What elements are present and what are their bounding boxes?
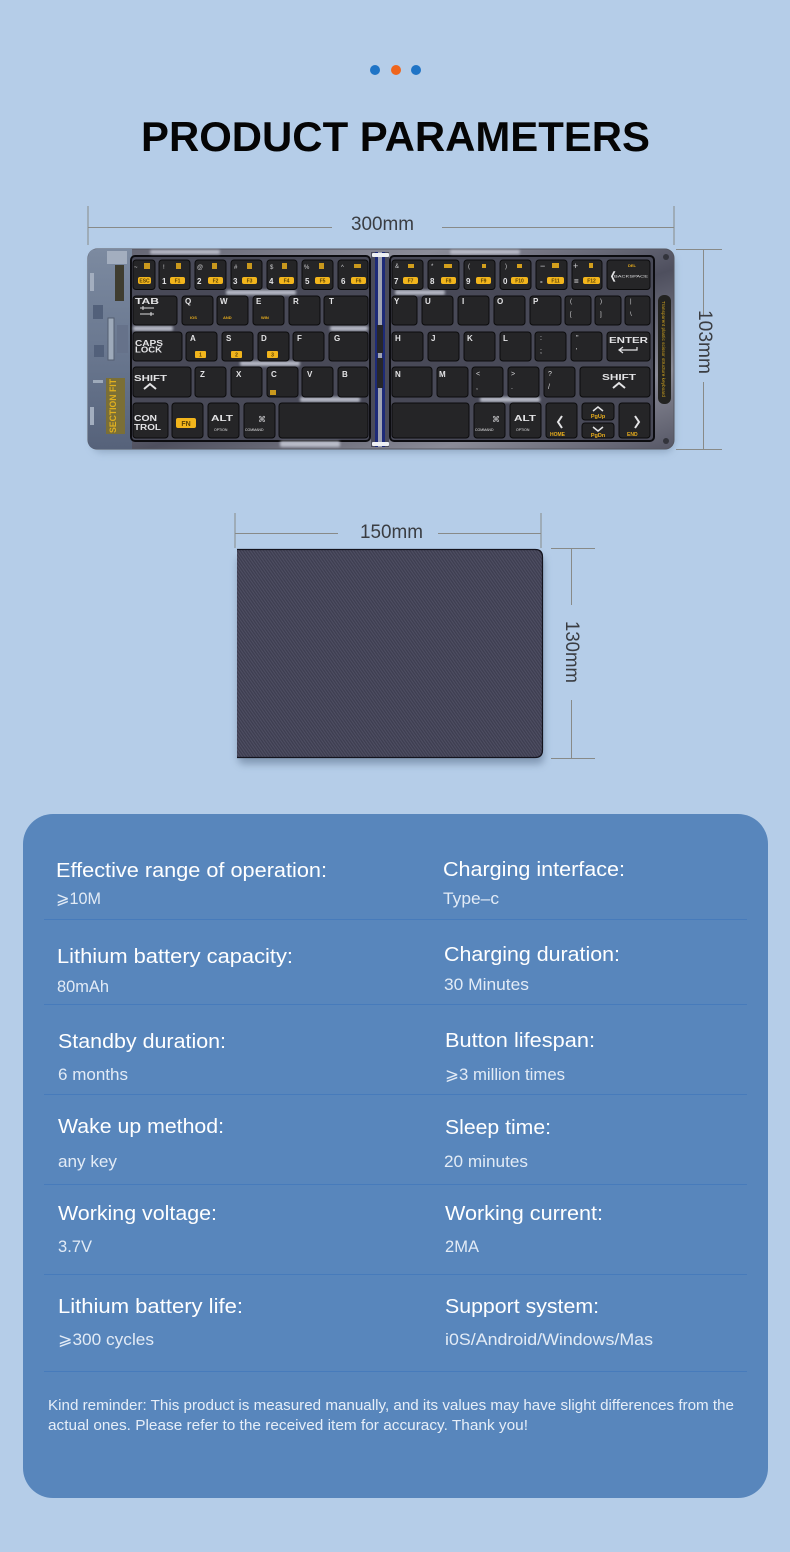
cover edge [237, 550, 542, 758]
left keys row 1: # [234, 265, 238, 271]
right keys row 1: * [431, 264, 434, 270]
right keys row 3: ; [540, 348, 542, 355]
row dividers [44, 920, 747, 1372]
right side strip [658, 254, 671, 444]
spec: charging duration [444, 943, 620, 994]
left keys row 3: 3 [271, 352, 274, 358]
right keys row 1: F10 [515, 278, 524, 284]
left keys row 1: F4 [284, 278, 290, 284]
left keys row 2: TAB [135, 297, 159, 306]
spec: effective range [56, 859, 327, 908]
dimension: 130mm height: 130mm [561, 621, 582, 683]
right keys row 1: 9 [466, 277, 471, 286]
right keys row 3: K [467, 334, 473, 343]
spec: working current [445, 1202, 603, 1256]
left keys row 1: F1 [175, 278, 181, 284]
left keys row 1: 3 [233, 277, 238, 286]
left keys row 1: F3 [247, 278, 253, 284]
right keys row 2: P [533, 297, 539, 306]
left keys row 2: AND [223, 315, 232, 320]
left keys row 1: F5 [320, 278, 326, 284]
right keys row 4: M [439, 370, 446, 379]
parameters panel [23, 814, 768, 1498]
spec: battery capacity: 80mAh [57, 977, 109, 996]
spec: charging interface: Charging interface: [443, 858, 625, 881]
keyboard shadow [92, 254, 674, 452]
spec: button lifespan: ⩾3 million times [445, 1065, 565, 1084]
left keys row 1: 6 [341, 277, 346, 286]
left keys row 4: C [271, 370, 277, 379]
left keys row 3: 1 [199, 352, 202, 358]
left keys row 3: D [261, 334, 267, 343]
spec: battery life: Lithium battery life: [58, 1295, 243, 1318]
left keys row 3: LOCK [135, 346, 162, 354]
left keys row 5: TROL [134, 423, 161, 432]
transparent circuit section [88, 249, 132, 449]
left keys row 4 [133, 367, 368, 397]
left keys row 3: S [226, 334, 232, 343]
fabric cover [237, 549, 543, 758]
right keys row 5: PgDn [591, 433, 606, 439]
left keys row 4: SHIFT [134, 374, 167, 383]
right keys row 4: , [476, 384, 478, 391]
right keys row 1: = [574, 277, 579, 286]
spec: support system: Support system: [445, 1295, 599, 1318]
right keys row 1: ( [468, 264, 470, 270]
spec: sleep time: 20 minutes [444, 1152, 528, 1171]
kind reminder note: actual ones. Please refer to the received item for accuracy. Thank you! [48, 1417, 528, 1434]
spec: button lifespan: Button lifespan: [445, 1029, 595, 1052]
left keys row 2: Q [185, 297, 191, 306]
right keys row 2: \ [630, 312, 632, 318]
left keys row 3: 2 [235, 352, 238, 358]
right keys row 3: L [503, 334, 508, 343]
panel background [23, 814, 768, 1498]
left keys row 1: 5 [305, 277, 310, 286]
transparent circuit section: SECTION FIT [108, 379, 118, 433]
right keys row 3: ENTER [609, 336, 648, 345]
right keys row 4 [392, 367, 650, 397]
spec: charging interface: Type–c [443, 889, 500, 908]
left keys row 1: ESC [139, 278, 150, 284]
right keys row 2: ) [600, 299, 602, 305]
left keys row 5: ALT [211, 414, 233, 423]
spec: charging interface [443, 858, 625, 908]
right keys row 1: F9 [481, 278, 487, 284]
left keys row 3: A [190, 334, 196, 343]
left keys row 5: CON [134, 414, 157, 423]
spec: effective range: ⩾10M [56, 889, 101, 908]
left keys row 5: OPTION [214, 428, 228, 432]
title: PRODUCT PARAMETERS [141, 113, 650, 160]
right keys row 5 [392, 403, 650, 439]
right keys row 2: ( [570, 299, 572, 305]
center hinge [371, 252, 389, 447]
right keys row 5: COMMAND [475, 428, 494, 432]
right keys row 3: H [395, 334, 401, 343]
metallic highlights [133, 250, 540, 447]
right keys row 2: | [630, 299, 632, 305]
left keys row 1: % [304, 265, 310, 271]
left keys row 5: ⌘ [258, 415, 266, 424]
left keys row 2: E [256, 297, 262, 306]
right keys row 5: PgUp [591, 414, 606, 420]
right keys row 1: ❬ [609, 271, 617, 282]
right keys row 2: I [462, 297, 464, 306]
left keys row 1: 4 [269, 277, 274, 286]
left keys row 3: G [334, 334, 340, 343]
right keys row 1: + [573, 261, 578, 271]
right keys row 3: J [431, 334, 435, 343]
spec: sleep time [444, 1116, 551, 1171]
dimension: 150mm width [235, 513, 541, 548]
spec: working current: 2MA [445, 1237, 480, 1256]
left keys row 1: 2 [197, 277, 202, 286]
spec: effective range: Effective range of operation: [56, 859, 327, 882]
right keys row 5: ALT [514, 414, 536, 423]
right keys row 1: & [395, 264, 399, 270]
right keys row 1: 8 [430, 277, 435, 286]
left keys row 1: ~ [134, 265, 138, 271]
left keys row 1 [133, 260, 368, 290]
left keys row 3: F [297, 334, 302, 343]
right keys row 3 [392, 332, 650, 361]
right keys row 1: - [540, 277, 543, 286]
left keys row 2 [133, 296, 368, 325]
right keys row 1: F8 [446, 278, 452, 284]
right keys row 2: ] [600, 312, 602, 318]
left keys row 1: ! [163, 265, 165, 271]
left keys row 2: W [220, 297, 228, 306]
left keys row 2: WIN [261, 315, 269, 320]
right keys row 1: F12 [587, 278, 596, 284]
left keys row 3: CAPS [135, 339, 164, 348]
spec: standby duration: Standby duration: [58, 1030, 226, 1053]
dimension: 103mm height: 103mm [694, 310, 715, 374]
left keys row 2: IOS [190, 315, 197, 320]
cover shadow [238, 556, 544, 764]
right keys row 1: − [540, 261, 545, 271]
spec: working current: Working current: [445, 1202, 603, 1225]
right keys row 3: " [576, 335, 579, 342]
spec: standby duration [58, 1030, 226, 1084]
left keys row 4: Z [200, 370, 205, 379]
right keys row 4: . [511, 384, 513, 391]
right keys row 1: 7 [394, 277, 399, 286]
spec: wake up method: any key [58, 1152, 117, 1171]
left keys row 1: 1 [162, 277, 167, 286]
dimension: 300mm width: 300mm [351, 214, 414, 235]
right keys row 1: 0 [503, 277, 508, 286]
right keys row 4: ? [548, 371, 552, 378]
right keys row 5: ⌘ [492, 415, 500, 424]
unfolded keyboard illustration [88, 249, 674, 452]
spec: battery life: ⩾300 cycles [58, 1330, 154, 1349]
kind reminder note [48, 1397, 734, 1434]
right keys row 1: F11 [551, 278, 560, 284]
spec: charging duration: 30 Minutes [444, 975, 529, 994]
dimension: 300mm width [88, 206, 674, 245]
spec: charging duration: Charging duration: [444, 943, 620, 966]
spec: support system [445, 1295, 653, 1349]
right keys row 4: N [395, 370, 401, 379]
spec: working voltage [58, 1202, 217, 1256]
right keys row 1: BACKSPACE [614, 274, 649, 278]
left keys row 4: B [342, 370, 348, 379]
spec: sleep time: Sleep time: [445, 1116, 551, 1139]
right keys row 5: HOME [550, 432, 566, 438]
right side strip: Transparent plastic scissor structure keyboard [661, 301, 666, 398]
left keys row 5 [133, 403, 368, 438]
dimension: 130mm height [551, 548, 595, 758]
right keys row 1 [392, 260, 650, 290]
spec: battery life [58, 1295, 243, 1349]
spec: battery capacity: Lithium battery capacity: [57, 945, 293, 968]
spec: button lifespan [445, 1029, 595, 1084]
left keys row 4: X [236, 370, 242, 379]
left keys row 1: $ [270, 265, 274, 271]
right keys row 5: OPTION [516, 428, 530, 432]
left keys row 5: COMMAND [245, 428, 264, 432]
left keys row 1: F6 [356, 278, 362, 284]
dimension: 103mm height [676, 249, 722, 450]
right keys row 1: DEL [628, 263, 637, 268]
right keys row 4: / [548, 384, 550, 391]
keyboard body [88, 249, 674, 449]
dimension: 150mm width: 150mm [360, 522, 423, 543]
spec: support system: i0S/Android/Windows/Mas [445, 1330, 653, 1349]
decorative dots [370, 65, 421, 75]
left keys row 3 [133, 332, 368, 361]
left keys row 2: T [329, 297, 334, 306]
left keys row 1: @ [197, 265, 203, 271]
left keys row 1: F2 [213, 278, 219, 284]
left keys row 4: V [307, 370, 313, 379]
spec: working voltage: Working voltage: [58, 1202, 217, 1225]
right keys row 1: ) [505, 264, 507, 270]
kind reminder note: Kind reminder: This product is measured manually, and its values may have slight differences from the [48, 1397, 734, 1414]
right keys row 4: < [476, 371, 480, 378]
right keys row 2: [ [570, 312, 572, 318]
left keys row 1: ^ [341, 265, 344, 271]
spec: wake up method: Wake up method: [58, 1115, 224, 1138]
right keys row 3: : [540, 335, 542, 342]
spec: wake up method [58, 1115, 224, 1171]
spec: working voltage: 3.7V [58, 1237, 93, 1256]
right keys row 2: Y [394, 297, 400, 306]
right keys row 5: END [627, 432, 638, 438]
left keys row 2: R [293, 297, 299, 306]
right keys row 2 [392, 296, 650, 325]
right key tray [389, 255, 655, 442]
right keys row 3: ' [576, 348, 577, 355]
spec: standby duration: 6 months [58, 1065, 128, 1084]
right keys row 1: F7 [408, 278, 414, 284]
right keys row 4: SHIFT [602, 373, 636, 382]
right keys row 4: > [511, 371, 515, 378]
folded keyboard with fabric cover [237, 549, 544, 764]
spec: battery capacity [57, 945, 293, 996]
right keys row 2: U [425, 297, 431, 306]
left key tray [130, 255, 371, 442]
left keys row 5: FN [181, 421, 191, 428]
right keys row 2: O [497, 297, 503, 306]
